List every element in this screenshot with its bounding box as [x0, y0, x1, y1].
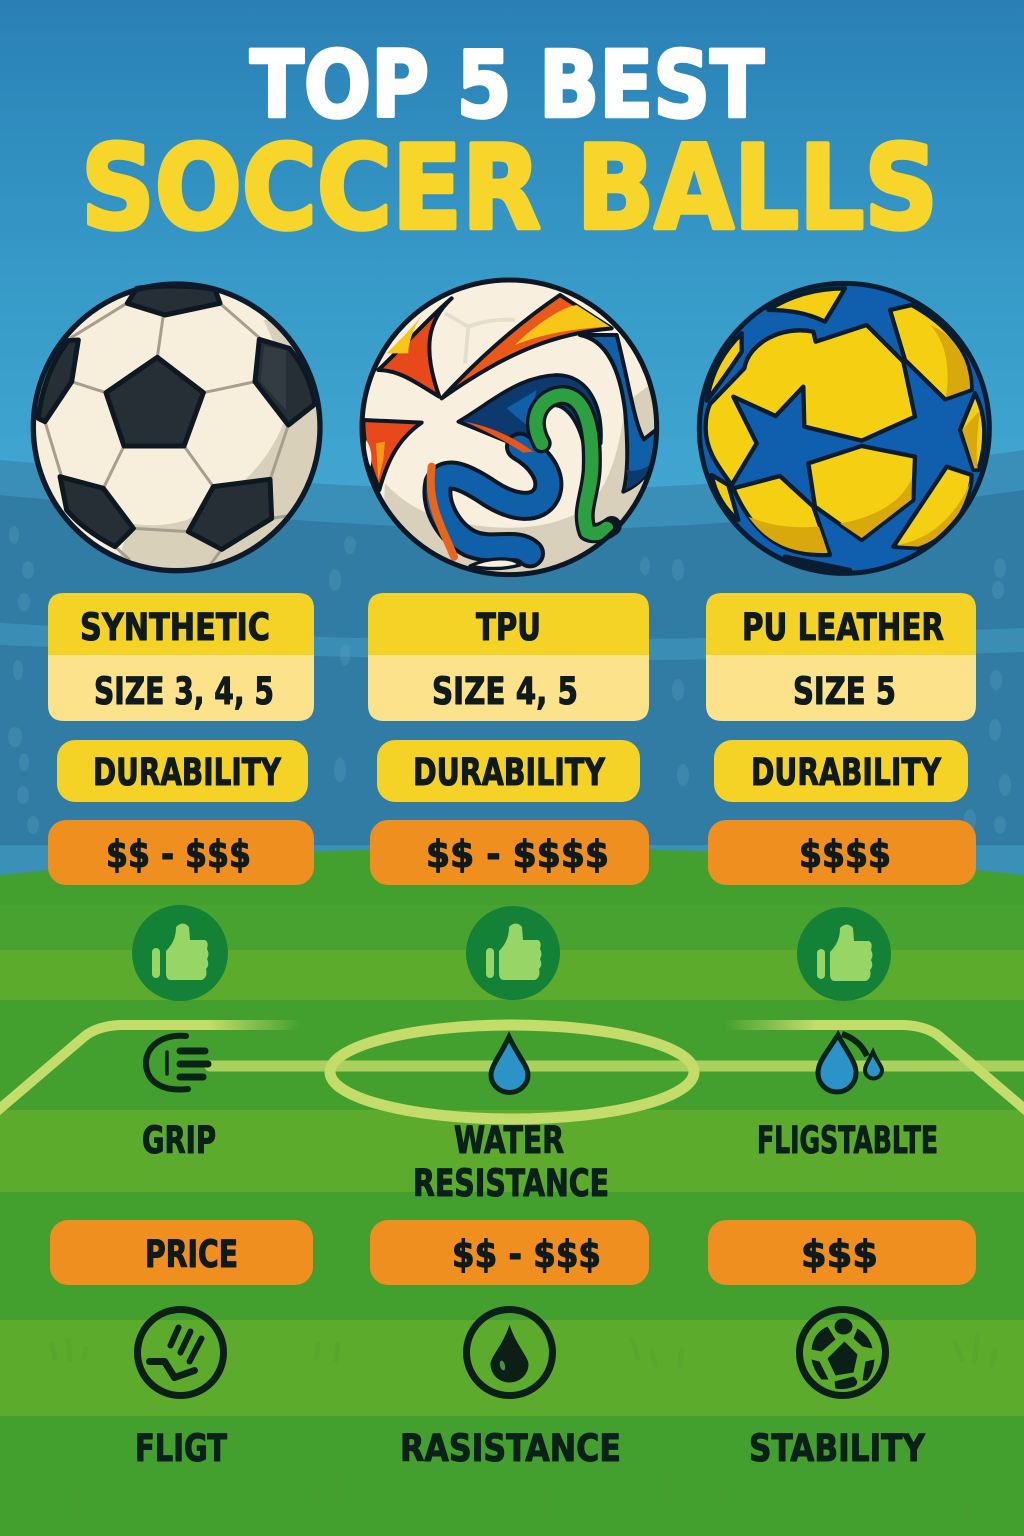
- feature label: flight: FLIGT: [135, 1426, 227, 1470]
- lower price pill 2: [370, 1220, 649, 1285]
- feature label: grip: GRIP: [142, 1118, 216, 1162]
- lower price pill 2: $$ - $$$: [452, 1232, 601, 1276]
- icon: water drops with flight arc: [818, 1034, 882, 1092]
- material and size card: synthetic: [48, 593, 314, 721]
- price pill 1: [48, 820, 314, 885]
- price pill 2: [370, 820, 649, 885]
- feature label: stability: STABILITY: [749, 1426, 926, 1470]
- swirl ribbon: [431, 375, 612, 569]
- durability pill 2: DURABILITY: [413, 750, 606, 794]
- price pill 3: $$$$: [799, 832, 891, 876]
- durability pill 1: [57, 740, 308, 802]
- durability pill 2: [377, 740, 640, 802]
- icon: water drop: [491, 1037, 528, 1092]
- icon: stability ball badge: [800, 1310, 886, 1396]
- title line: top 5 best: TOP 5 BEST: [250, 32, 764, 138]
- price pill 3: [708, 820, 976, 885]
- lower price pill 3: $$$: [801, 1232, 878, 1276]
- title line: soccer balls: SOCCER BALLS: [81, 121, 938, 256]
- feature label: water resistance: WATER: [454, 1118, 564, 1162]
- price pill 1: $$ - $$$: [106, 832, 251, 876]
- icon: thumbs up 3: [797, 907, 891, 1001]
- background: sky and stadium: [0, 0, 1024, 880]
- material label: PU LEATHER: [742, 605, 944, 649]
- feature label: water resistance: [413, 1118, 609, 1205]
- title: [81, 32, 938, 256]
- size label: SIZE 3, 4, 5: [94, 669, 274, 713]
- feature label: fligstablte: FLIGSTABLTE: [757, 1118, 938, 1162]
- lower price pill 1: [50, 1220, 313, 1285]
- price pill 2: $$ - $$$$: [426, 832, 609, 876]
- lower price pill 1: PRICE: [145, 1232, 238, 1276]
- size label: SIZE 5: [793, 669, 896, 713]
- feature label: water resistance: RESISTANCE: [413, 1161, 609, 1205]
- icon: hand grip badge: [138, 1310, 224, 1396]
- size label: SIZE 4, 5: [432, 669, 578, 713]
- material label: SYNTHETIC: [80, 605, 270, 649]
- material label: TPU: [476, 605, 541, 649]
- durability pill 3: DURABILITY: [751, 750, 942, 794]
- icon: grip: [146, 1036, 208, 1089]
- material and size card: TPU: [368, 593, 649, 721]
- durability pill 3: [714, 740, 968, 802]
- ball: classic black and white: [33, 284, 327, 577]
- lower price pill 3: [708, 1220, 976, 1285]
- icon: water resistance badge: [466, 1310, 552, 1396]
- material and size card: PU leather: [706, 593, 976, 721]
- ball: colourful swirl: [362, 280, 670, 587]
- background: grass pitch with stripes: [0, 848, 1024, 1536]
- ball: yellow with blue stars: [699, 283, 989, 573]
- icon: thumbs up 2: [466, 906, 560, 1000]
- durability pill 1: DURABILITY: [93, 750, 282, 794]
- icon: thumbs up 1: [132, 905, 228, 1001]
- feature label: resistance: RASISTANCE: [400, 1426, 621, 1470]
